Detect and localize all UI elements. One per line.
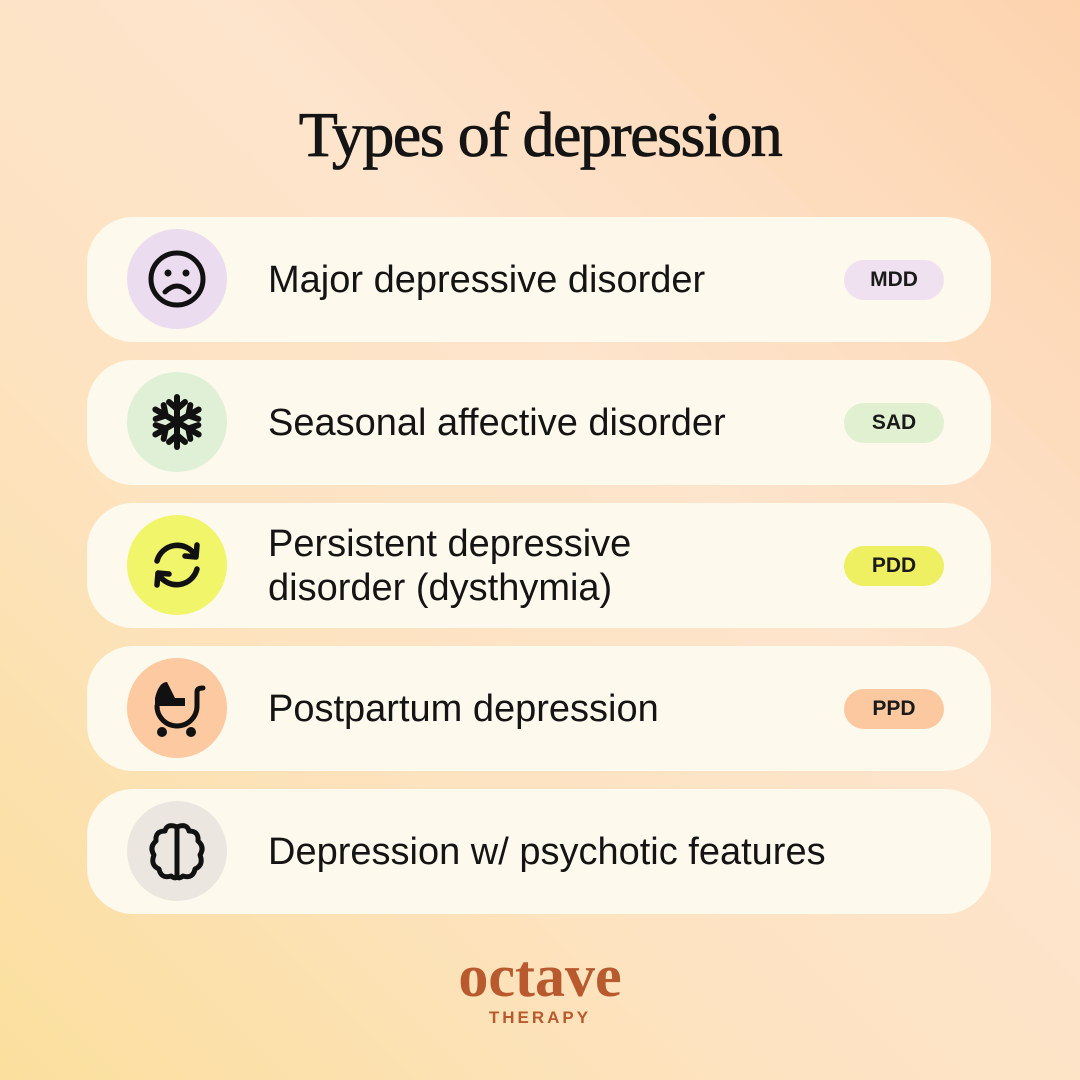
- card: PDD: [87, 503, 991, 628]
- label: Postpartum depression: [268, 688, 659, 730]
- icon: snowflake: [127, 372, 227, 472]
- icon: cycle arrows: [127, 515, 227, 615]
- icon: sad face: [127, 229, 227, 329]
- label: [268, 522, 631, 608]
- label: Persistent depressive: [268, 522, 631, 564]
- logo: THERAPY: [489, 1008, 591, 1027]
- card: PPD: [87, 646, 991, 771]
- label: disorder (dysthymia): [268, 566, 612, 608]
- card: SAD: [87, 360, 991, 485]
- pill: MDD: MDD: [870, 268, 918, 291]
- pill: SAD: [844, 403, 944, 443]
- icon: brain: [127, 801, 227, 901]
- icon: stroller: [127, 658, 227, 758]
- pill: PDD: PDD: [872, 554, 916, 577]
- pill: SAD: SAD: [872, 411, 916, 434]
- card: psychotic features: [87, 789, 991, 914]
- logo: octave: [458, 943, 622, 1009]
- label: Depression w/ psychotic features: [268, 830, 826, 872]
- card: MDD: [87, 217, 991, 342]
- pill: PPD: [844, 689, 944, 729]
- label: Seasonal affective disorder: [268, 402, 726, 444]
- pill: PPD: PPD: [872, 697, 916, 720]
- pill: MDD: [844, 260, 944, 300]
- pill: PDD: [844, 546, 944, 586]
- label: Major depressive disorder: [268, 258, 705, 300]
- title: Types of depression: [299, 99, 781, 170]
